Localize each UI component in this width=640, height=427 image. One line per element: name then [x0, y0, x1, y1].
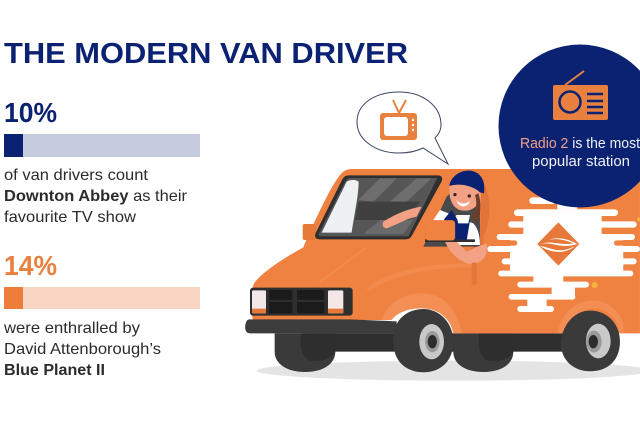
- wheel arches: [382, 293, 462, 333]
- rear front-side wheels: [275, 333, 513, 372]
- caption: Downton Abbey: [4, 167, 188, 226]
- grille and headlights: [250, 288, 353, 316]
- caption: Blue Planet II: [3, 320, 161, 379]
- icon: radio: [553, 71, 608, 120]
- arm on wheel: [383, 207, 422, 228]
- cap: [449, 171, 484, 193]
- chassis: [307, 333, 573, 352]
- outer arm: [445, 238, 487, 264]
- front wheel: [393, 309, 453, 372]
- ground shadow: [257, 361, 640, 381]
- progress bar 14%: [4, 287, 200, 309]
- door handle: [472, 263, 477, 285]
- stat: 14 percent: [3, 250, 200, 379]
- caption: Downton Abbey: of van drivers count: [4, 167, 149, 184]
- radio caption: popular station: [532, 153, 630, 170]
- driver: [383, 171, 489, 264]
- van illustration: [245, 169, 640, 381]
- value 14%: 14%: [4, 250, 57, 281]
- stat: 10 percent: [4, 97, 200, 226]
- side mirror left: [303, 224, 316, 240]
- icon: TV: [380, 100, 417, 140]
- caption: Blue Planet II: Blue Planet II: [4, 362, 105, 379]
- driver's shadow on van: [460, 180, 489, 263]
- white livery: [487, 197, 640, 312]
- title: THE MODERN VAN DRIVER: [4, 38, 408, 70]
- progress bar 10%: [4, 134, 200, 157]
- radio caption: [520, 135, 640, 170]
- face: [449, 183, 481, 211]
- value 10%: 10%: [4, 97, 57, 128]
- speech bubble with TV: [357, 92, 448, 164]
- torso: [433, 210, 480, 245]
- yellow dots: [592, 217, 640, 288]
- van body: [251, 169, 640, 333]
- radio callout: [498, 44, 640, 208]
- bumper: [245, 319, 397, 333]
- logo diamond: [537, 222, 579, 266]
- door sill dark: [425, 239, 475, 242]
- caption: Downton Abbey: Downton Abbey as their: [4, 188, 188, 205]
- cab window: [423, 190, 480, 247]
- caption: Downton Abbey: favourite TV show: [4, 209, 136, 226]
- livery orange notches: [500, 228, 637, 270]
- caption: Blue Planet II: were enthralled by: [3, 320, 140, 337]
- wing mirror: [426, 220, 455, 240]
- rear wheel: [561, 311, 620, 371]
- windscreen: [315, 175, 442, 239]
- door crease: [318, 247, 473, 292]
- caption: Blue Planet II: David Attenborough’s: [4, 341, 161, 358]
